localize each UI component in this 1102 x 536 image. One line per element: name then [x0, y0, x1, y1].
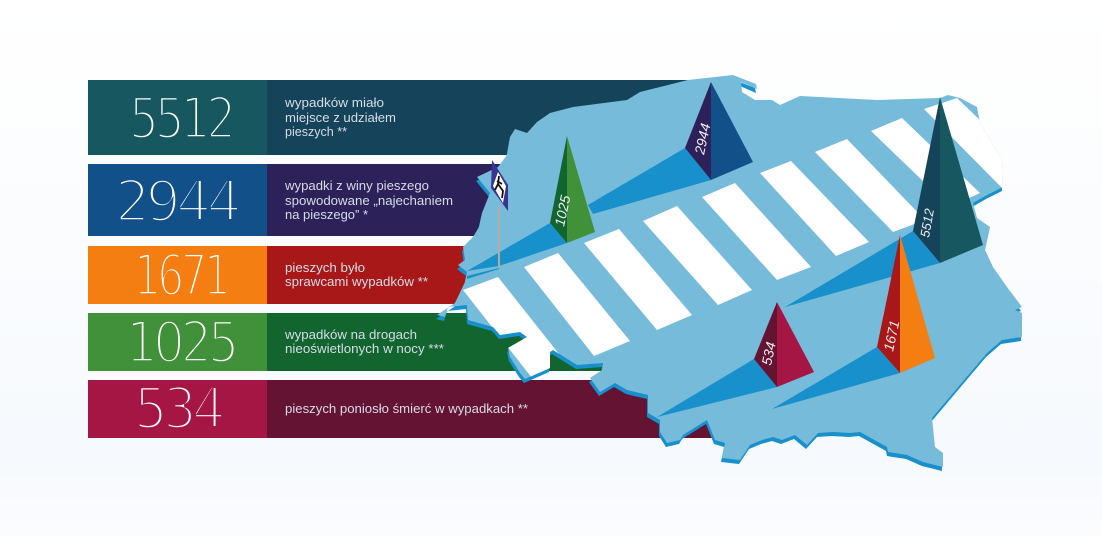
- row: 5512 accidents with pedestrians: [88, 80, 700, 155]
- pyramid: 1025: 1025: [551, 194, 573, 228]
- pyramid: 1025: [550, 136, 595, 243]
- row: 5512 accidents with pedestrians: wypadków miało: [284, 96, 384, 110]
- row: 534 pedestrians killed: pieszych poniosło śmierć w wypadkach **: [285, 402, 528, 416]
- pyramid: 5512: 5512: [917, 207, 937, 239]
- row: 5512 accidents with pedestrians: pieszych **: [285, 125, 347, 139]
- shadows of the pyramids: [467, 148, 940, 417]
- row: 1025 unlit roads at night: nieoświetlonych w nocy ***: [285, 342, 444, 356]
- row: 1025 unlit roads at night: [88, 310, 650, 376]
- row: 5512 accidents with pedestrians: 5512: [129, 86, 232, 152]
- row: 534 pedestrians killed: [88, 376, 715, 442]
- row: 1671 pedestrians at fault: sprawcami wypadków **: [285, 275, 428, 289]
- pyramid: 534: [754, 302, 814, 387]
- row: 1671 pedestrians at fault: 1671: [134, 243, 227, 309]
- row: 1025 unlit roads at night: 1025: [126, 310, 236, 376]
- icon: pedestrian crossing road sign: [491, 160, 508, 267]
- pyramid: 5512: [913, 97, 983, 263]
- row: 5512 accidents with pedestrians: miejsce z udziałem: [285, 111, 396, 125]
- row: 1671 pedestrians at fault: [88, 243, 500, 309]
- pyramid: 1671: [877, 235, 935, 373]
- pyramid: 2944: 2944: [691, 122, 713, 157]
- pyramid: 1671: 1671: [880, 319, 902, 353]
- row: 2944 pedestrian-caused accidents: na pieszego” *: [285, 208, 368, 222]
- row: 534 pedestrians killed: 534: [134, 376, 224, 442]
- row: 1025 unlit roads at night: wypadków na drogach: [284, 328, 417, 342]
- pyramid: 2944: [685, 82, 753, 180]
- row: 2944 pedestrian-caused accidents: 2944: [115, 169, 240, 235]
- pyramid: 534: 534: [758, 340, 779, 367]
- row: 2944 pedestrian-caused accidents: wypadki z winy pieszego: [284, 179, 429, 193]
- row: 1671 pedestrians at fault: pieszych było: [285, 261, 365, 275]
- row: 2944 pedestrian-caused accidents: spowodowane „najechaniem: [285, 194, 453, 208]
- map of Poland with pedestrian crossing: [436, 75, 1040, 471]
- row: 2944 pedestrian-caused accidents: [88, 164, 520, 236]
